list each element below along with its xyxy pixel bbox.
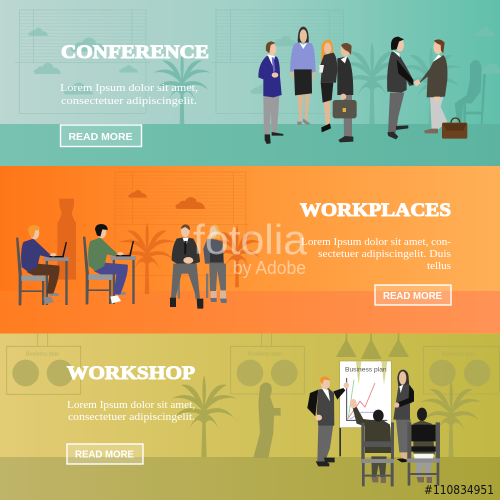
- man with briefcase: [333, 43, 357, 142]
- watermark: fotolia by Adobe: fotolia: [193, 216, 308, 263]
- seated woman with tablet: [203, 224, 227, 303]
- text: workplaces body: tellus: [427, 260, 451, 272]
- background clouds: [28, 28, 500, 94]
- background boards: Business plan: [442, 351, 475, 357]
- text: workplaces body: sectetuer adipiscingelit. Duis: [318, 248, 451, 260]
- background boards: [7, 333, 499, 394]
- background window: [113, 172, 248, 275]
- heading: workshop: WORKSHOP: [67, 363, 195, 384]
- top edge highlight: [0, 333, 500, 334]
- button: read more: READ MORE: [383, 290, 442, 302]
- seated man with tablet: [170, 224, 203, 309]
- text: workplaces body: [301, 236, 451, 272]
- button: read more: READ MORE: [68, 131, 132, 143]
- panel: conference: [0, 0, 500, 166]
- background clouds: [128, 190, 205, 209]
- background woman silhouette: [253, 383, 281, 458]
- woman in lilac sweater: [289, 27, 316, 125]
- background boards: Business plan: [26, 351, 59, 357]
- presenter: [307, 376, 349, 466]
- woman presenter: [393, 370, 414, 462]
- man in blue jacket: [258, 41, 283, 144]
- text: workplaces body: Lorem Ipsum dolor sit amet, con-: [301, 236, 451, 248]
- worker one at desk: [16, 225, 69, 305]
- text: workshop body: [67, 399, 195, 423]
- handshake man left: [387, 37, 413, 139]
- text: workshop body: Lorem Ipsum dolor sit amet,: [67, 399, 195, 411]
- brown bag: [442, 118, 467, 139]
- button: read more: [375, 285, 451, 305]
- flipchart with graph: Business plan: [345, 366, 387, 373]
- panel: workshop: [0, 333, 500, 500]
- workshop background: [0, 333, 500, 500]
- handshake man right: [413, 39, 447, 133]
- background windows: [15, 10, 347, 113]
- conference floor: [0, 124, 500, 166]
- watermark: fotolia by Adobe: by Adobe: [233, 258, 306, 278]
- background water cooler: [57, 199, 76, 280]
- button: read more: [60, 125, 142, 146]
- background palms: [171, 375, 482, 457]
- background palms: [118, 222, 262, 294]
- text: workshop body: consectetuer adipiscingelit.: [68, 411, 195, 423]
- heading: workplaces: WORKPLACES: [300, 200, 451, 221]
- button: read more: [67, 444, 143, 464]
- woman with orange hair: [319, 40, 337, 132]
- workplaces floor: [0, 291, 500, 333]
- text: conference body: [60, 82, 198, 107]
- seated audience member two: [407, 408, 440, 486]
- text: conference body: Lorem Ipsum dolor sit amet,: [60, 82, 198, 94]
- panel: workplaces: [0, 166, 500, 333]
- conference background: [0, 0, 500, 166]
- workplaces background: [0, 166, 500, 333]
- worker two at desk: [83, 224, 136, 304]
- button: read more: READ MORE: [75, 448, 134, 460]
- workshop floor: [0, 457, 500, 500]
- workshop scene: [307, 361, 440, 486]
- background palms: [153, 42, 462, 124]
- background lamps: [336, 333, 409, 359]
- heading: conference: CONFERENCE: [61, 42, 209, 63]
- text: conference body: consectetuer adipiscingelit.: [61, 95, 197, 107]
- background boards: Business plan: [248, 351, 282, 357]
- background seated silhouette: [455, 60, 486, 124]
- seated audience member one: [350, 399, 394, 486]
- people: conference group: [258, 27, 467, 144]
